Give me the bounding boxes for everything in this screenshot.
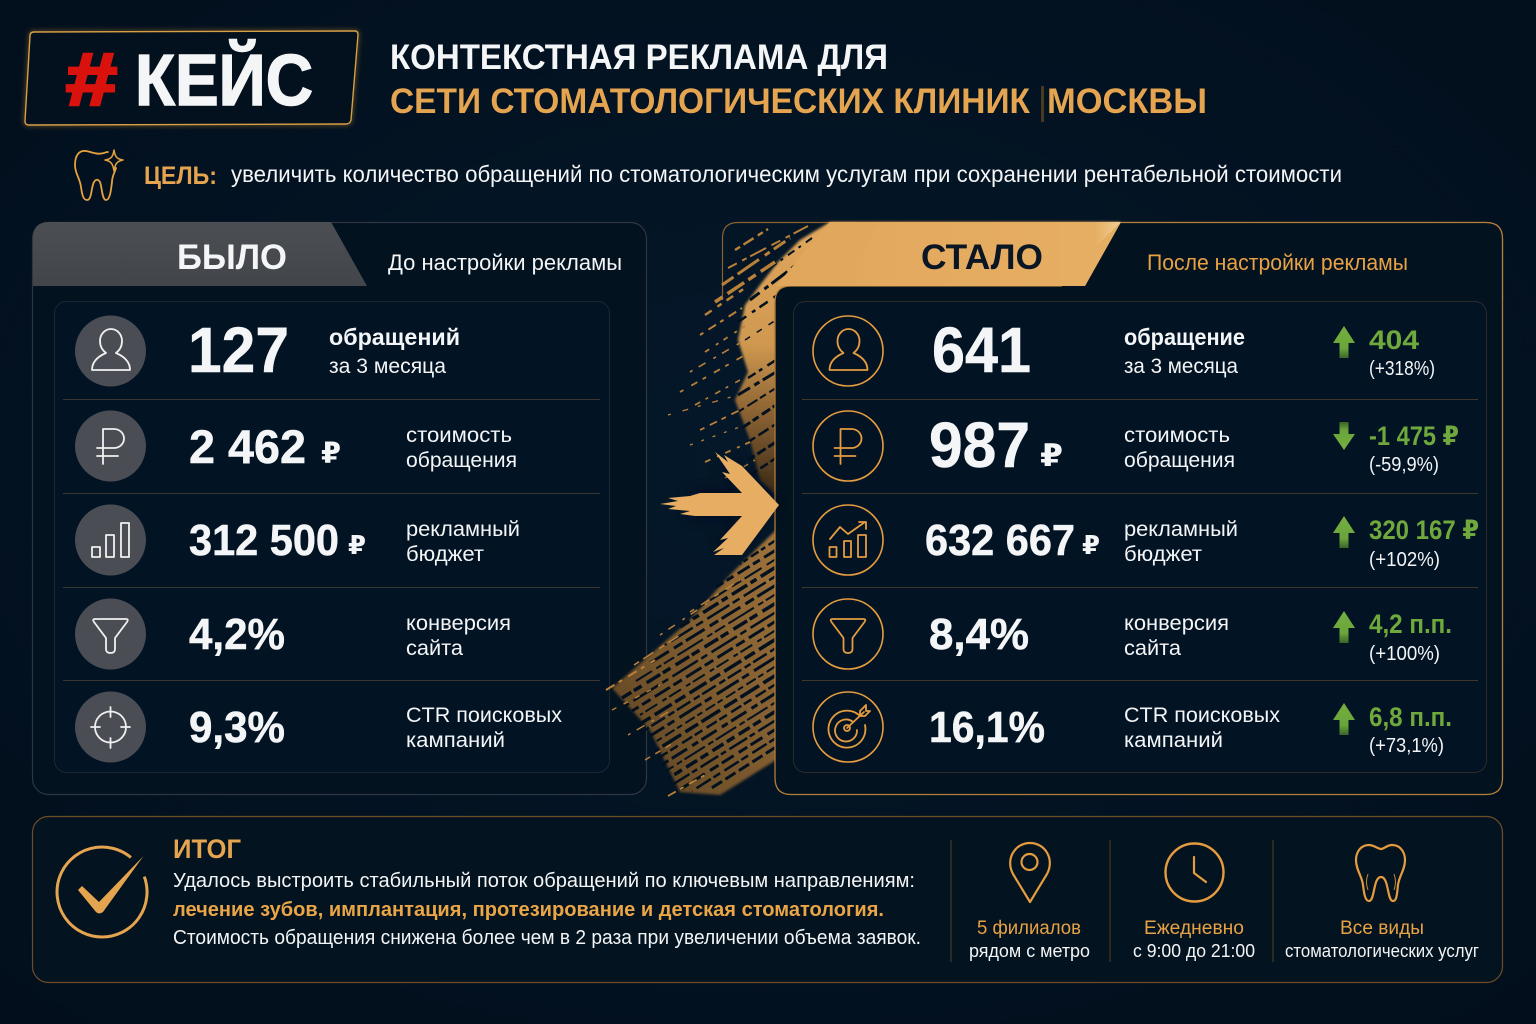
row: конверсия стало xyxy=(813,599,1452,669)
row: бюджет было: ₽ xyxy=(348,530,366,560)
row: ctr было: кампаний xyxy=(406,728,505,752)
feature: филиалы xyxy=(969,843,1090,961)
goal text: ЦЕЛЬ: xyxy=(144,162,217,190)
row: бюджет стало: 632 667 xyxy=(925,516,1075,565)
outer frame: стало xyxy=(722,222,1502,300)
delta: 320 167: 320 167 ₽ xyxy=(1369,515,1479,545)
icon: tooth with sparkle xyxy=(75,150,123,200)
title: МОСКВЫ xyxy=(1047,82,1207,121)
row: обращения стало: за 3 месяца xyxy=(1124,355,1238,378)
row: стоимость было: ₽ xyxy=(321,438,341,470)
badge: #КЕЙС xyxy=(25,31,358,125)
tab: стало: СТАЛО xyxy=(921,238,1043,277)
subtitle: до настройки: До настройки рекламы xyxy=(388,250,622,275)
row: обращения стало: обращение xyxy=(1124,324,1245,350)
delta: 320 167 xyxy=(1333,515,1479,571)
row: бюджет было xyxy=(75,504,520,576)
icon: check in circle xyxy=(57,847,147,937)
delta: 320 167: (+102%) xyxy=(1369,549,1440,571)
row: конверсия стало: конверсия xyxy=(1124,611,1229,635)
delta: 4,2 п.п.: (+100%) xyxy=(1369,643,1440,665)
delta: 4,2 п.п.: 4,2 п.п. xyxy=(1369,609,1452,639)
feature: часы работы: Ежедневно xyxy=(1144,918,1244,939)
delta: 6,8 п.п.: 6,8 п.п. xyxy=(1369,702,1452,732)
panel: итог xyxy=(32,816,1502,982)
row: ctr стало: 16,1% xyxy=(929,703,1045,752)
arrow: было to стало xyxy=(660,452,779,555)
row: бюджет стало xyxy=(813,505,1479,575)
row: обращения стало: 641 xyxy=(932,314,1031,386)
goal text: увеличить количество обращений по стоматологическим услугам при сохранении рентабельной стоимости xyxy=(231,161,1342,187)
row: ctr было xyxy=(75,692,562,762)
delta: 404: 404 xyxy=(1369,325,1419,355)
row: конверсия было: конверсия xyxy=(406,611,511,635)
tab: было xyxy=(33,222,367,286)
row: бюджет стало: бюджет xyxy=(1124,542,1202,566)
delta: 404: (+318%) xyxy=(1369,358,1435,380)
feature: все виды услуг: Все виды xyxy=(1340,918,1424,939)
row: стоимость стало: 987 xyxy=(929,409,1030,481)
delta: 6,8 п.п. xyxy=(1333,702,1452,757)
feature: филиалы: рядом с метро xyxy=(969,941,1090,961)
delta: 4,2 п.п. xyxy=(1333,609,1452,665)
row: стоимость стало xyxy=(813,409,1459,481)
badge: #КЕЙС: # xyxy=(66,38,117,121)
delta: -1 475: (-59,9%) xyxy=(1369,454,1439,476)
row: обращения было xyxy=(75,314,460,386)
title xyxy=(390,38,1207,122)
row: конверсия стало: 8,4% xyxy=(929,610,1029,659)
row: бюджет стало: рекламный xyxy=(1124,517,1238,541)
tab: стало xyxy=(776,222,1121,286)
badge: #КЕЙС: КЕЙС xyxy=(135,39,313,121)
row: конверсия было xyxy=(75,598,511,670)
row: конверсия было: сайта xyxy=(406,636,463,660)
row: бюджет было: 312 500 xyxy=(189,516,339,565)
summary text: ИТОГ xyxy=(173,834,241,864)
row: бюджет стало: ₽ xyxy=(1082,530,1100,560)
summary text: лечение зубов, имплантация, протезирование и детская стоматология. xyxy=(173,899,884,921)
feature: филиалы: 5 филиалов xyxy=(977,918,1081,939)
summary text: Удалось выстроить стабильный поток обращений по ключевым направлениям: xyxy=(173,870,915,892)
row: ctr стало xyxy=(813,692,1452,762)
panel: было xyxy=(32,222,646,794)
delta: -1 475 xyxy=(1333,421,1459,476)
row: обращения было: за 3 месяца xyxy=(329,355,446,378)
row: обращения стало xyxy=(813,314,1435,386)
subtitle: после настройки: После настройки рекламы xyxy=(1147,250,1408,275)
row: стоимость стало: стоимость xyxy=(1124,423,1230,447)
feature: все виды услуг xyxy=(1285,845,1479,961)
row: конверсия было: 4,2% xyxy=(189,610,285,659)
row: обращения было: обращений xyxy=(329,324,460,350)
title: СЕТИ СТОМАТОЛОГИЧЕСКИХ КЛИНИК xyxy=(390,82,1031,121)
row: бюджет было: рекламный xyxy=(406,517,520,541)
summary text: Стоимость обращения снижена более чем в 2 раза при увеличении объема заявок. xyxy=(173,927,921,949)
row: ctr стало: CTR поисковых xyxy=(1124,703,1280,727)
title: КОНТЕКСТНАЯ РЕКЛАМА ДЛЯ xyxy=(390,38,888,77)
delta: 6,8 п.п.: (+73,1%) xyxy=(1369,735,1444,757)
row: стоимость было: обращения xyxy=(406,448,517,472)
feature: часы работы: с 9:00 до 21:00 xyxy=(1133,941,1255,961)
row: стоимость стало: обращения xyxy=(1124,448,1235,472)
row: стоимость было: стоимость xyxy=(406,423,512,447)
row: стоимость было xyxy=(75,410,517,482)
row: обращения было: 127 xyxy=(188,314,289,386)
feature: часы работы xyxy=(1133,844,1255,961)
summary text xyxy=(173,834,921,949)
row: бюджет было: бюджет xyxy=(406,542,484,566)
brush stroke background xyxy=(606,222,1121,796)
row: ctr было: 9,3% xyxy=(189,703,285,752)
delta: -1 475: -1 475 ₽ xyxy=(1369,421,1459,451)
row: ctr было: CTR поисковых xyxy=(406,703,562,727)
row: ctr стало: кампаний xyxy=(1124,728,1223,752)
row: стоимость стало: ₽ xyxy=(1040,438,1063,473)
feature: все виды услуг: стоматологических услуг xyxy=(1285,941,1479,961)
delta: 404 xyxy=(1333,325,1435,380)
tab: было: БЫЛО xyxy=(177,238,287,277)
row: стоимость было: 2 462 xyxy=(189,420,306,473)
row: конверсия стало: сайта xyxy=(1124,636,1181,660)
panel: стало xyxy=(775,222,1502,794)
